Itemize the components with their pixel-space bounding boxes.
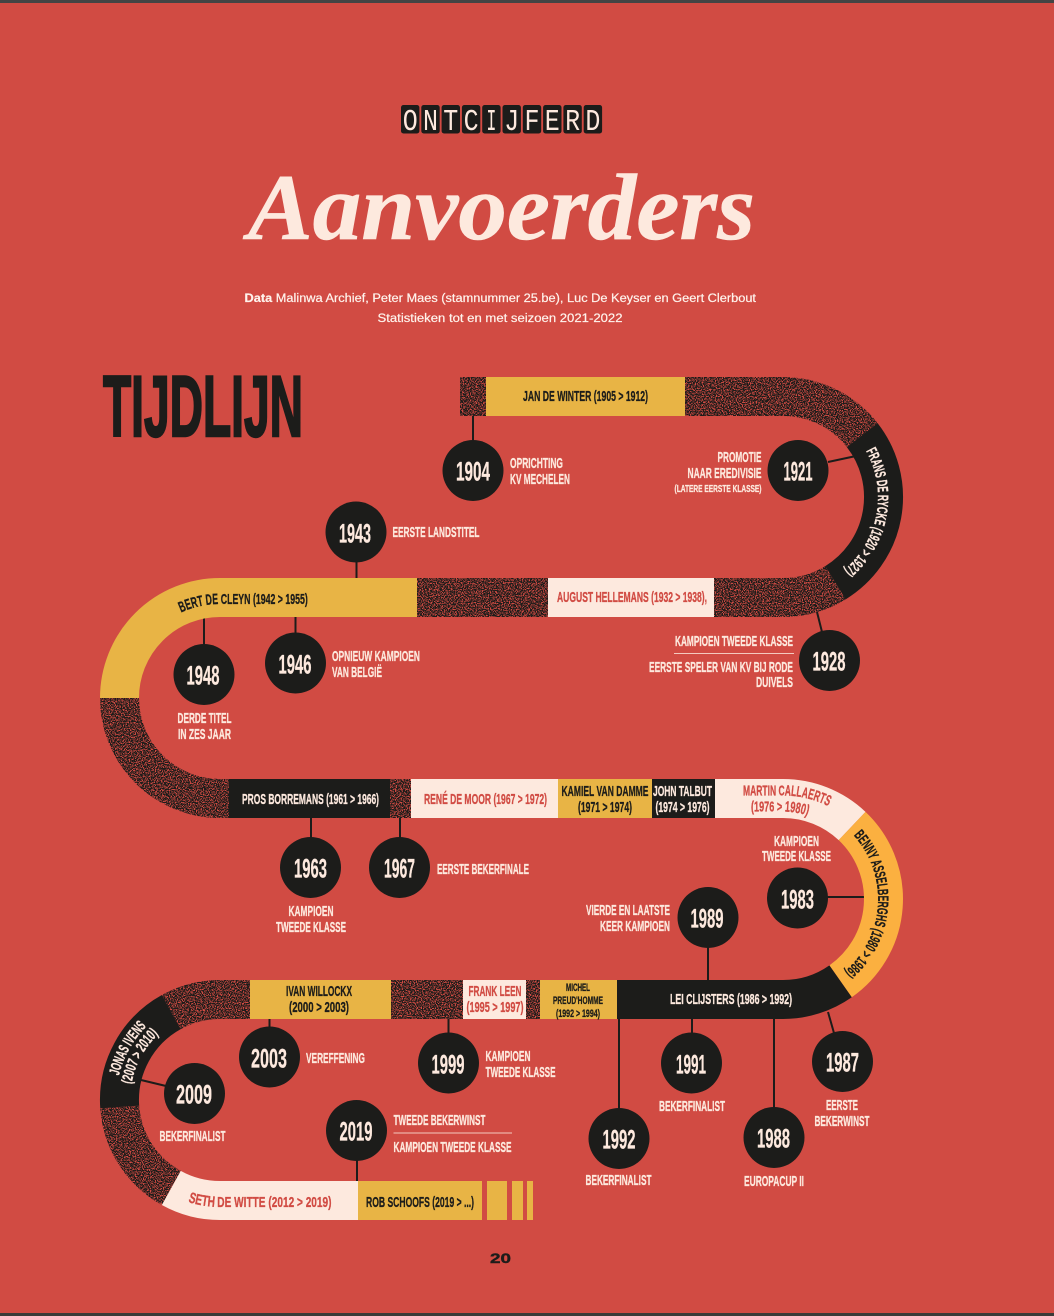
milestone: 1963 [276, 837, 346, 936]
captain segment: Frank Leen: FRANK LEEN [468, 983, 522, 1000]
kicker: ONTCIJFERD flip-board tiles: T [443, 105, 458, 140]
subtitle: data sources: Statistieken tot en met seizoen 2021-2022 [378, 313, 622, 325]
milestone: 1946: OPNIEUW KAMPIOEN [332, 648, 420, 665]
milestone: 1983: 1983 [781, 884, 814, 914]
page number: 20 [490, 1250, 511, 1266]
milestone: 1967 [369, 837, 529, 898]
milestone: 1948: 1948 [186, 660, 220, 690]
milestone: 1943: 1943 [339, 518, 371, 548]
captain segment: René De Moor: RENÉ DE MOOR (1967 > 1972) [424, 791, 547, 808]
milestone: 1991: 1991 [676, 1049, 706, 1079]
milestone: 1904 [442, 440, 570, 501]
milestone: 1904: KV MECHELEN [510, 471, 570, 488]
captain segment: Kamiel Van Damme: KAMIEL VAN DAMME [562, 783, 648, 800]
captain segment: Martin Callaerts: (1976 > 1980) [751, 800, 810, 818]
subtitle: data sources [244, 293, 757, 325]
milestone: 2003: 2003 [251, 1043, 287, 1073]
milestone: 1987: EERSTE [826, 1097, 858, 1114]
captain segment: Rob Schoofs: ROB SCHOOFS (2019 > ...) [366, 1194, 474, 1211]
milestone: 1987 [812, 1031, 873, 1130]
captain segment: Jonas Ivens: JONAS IVENS [109, 1020, 146, 1076]
captain segment: Michel Preud'homme: (1992 > 1994) [556, 1008, 600, 1020]
milestone: 1963: KAMPIOEN [288, 903, 334, 920]
milestone: 2009 [160, 1063, 226, 1145]
milestone: 1928 [649, 630, 860, 691]
milestone: 1946: VAN BELGIË [332, 664, 382, 681]
captain segment: Benny Asselberghs: BENNY ASSELBERGHS (1980 > 1986) [844, 828, 889, 979]
milestone: 1963: 1963 [294, 853, 327, 883]
milestone: 1904: 1904 [456, 456, 490, 486]
captain segment: Pros Borremans: PROS BORREMANS (1961 > 1966) [242, 791, 379, 808]
captain segment: Bert De Cleyn: BERT DE CLEYN (1942 > 1955) [178, 592, 308, 612]
captain segment: Ivan Willockx: (2000 > 2003) [289, 999, 349, 1016]
milestone: 1948 [174, 644, 234, 743]
milestone: 1999: KAMPIOEN [486, 1048, 530, 1065]
milestone: 1992: BEKERFINALIST [586, 1172, 652, 1189]
milestone: 1988: 1988 [757, 1123, 790, 1153]
captain segment: Frans De Rycke [825, 423, 904, 600]
kicker: ONTCIJFERD flip-board tiles [401, 105, 602, 140]
milestone: 1928: KAMPIOEN TWEEDE KLASSE [675, 633, 793, 650]
captain segment: Jonas Ivens: (2007 > 2010) [120, 1028, 160, 1084]
captain segment: Kamiel Van Damme [558, 783, 652, 816]
milestone: 1991 [659, 1032, 725, 1115]
kicker: ONTCIJFERD flip-board tiles: F [524, 105, 540, 140]
milestone: 1921: NAAR EREDIVISIE [688, 465, 762, 482]
milestone: 1992: 1992 [602, 1124, 636, 1154]
captain segment: Michel Preud'homme [540, 982, 617, 1020]
milestone: 1983: KAMPIOEN [774, 833, 819, 850]
captain segment: Bert De Cleyn [100, 578, 417, 698]
captain segment: Benny Asselberghs [830, 812, 903, 998]
captain segment: John Talbut: (1974 > 1976) [656, 799, 710, 816]
captain segment: Frank Leen [463, 983, 526, 1016]
milestone: 1988 [744, 1107, 804, 1190]
captain segment: Seth De Witte: SETH DE WITTE (2012 > 2019) [188, 1192, 332, 1210]
milestone: 1987: 1987 [826, 1047, 859, 1077]
kicker: ONTCIJFERD flip-board tiles: J [504, 105, 519, 140]
captain segment: Martin Callaerts: MARTIN CALLAERTS [744, 785, 832, 806]
kicker: ONTCIJFERD flip-board tiles: I [486, 105, 496, 140]
milestone: 1999: 1999 [432, 1049, 464, 1079]
milestone: 1989: KEER KAMPIOEN [600, 918, 670, 935]
title: Aanvoerders [243, 156, 755, 260]
milestone: 1943: EERSTE LANDSTITEL [392, 524, 480, 541]
milestone: 2003 [239, 1026, 365, 1088]
kicker: ONTCIJFERD flip-board tiles: E [545, 105, 560, 140]
milestone: 1928: 1928 [812, 646, 846, 676]
milestone: 1921: 1921 [784, 456, 812, 486]
milestone: 1921 [674, 440, 828, 501]
milestone: 1987: BEKERWINST [814, 1113, 870, 1130]
captain segment: Ivan Willockx [250, 983, 391, 1016]
captain segment: Kamiel Van Damme: (1971 > 1974) [578, 799, 632, 816]
milestone: 1963: TWEEDE KLASSE [276, 919, 346, 936]
milestone: 1983: TWEEDE KLASSE [762, 848, 831, 865]
captain segment: Lei Clijsters [617, 981, 841, 1008]
milestone: 1921: (LATERE EERSTE KLASSE) [674, 483, 762, 495]
milestone: 1943 [326, 502, 480, 562]
timeline track: undocumented (grainy) stretches [120, 396, 862, 1188]
milestone: 1999 [418, 1032, 556, 1094]
captain segment: Frank Leen: (1995 > 1997) [466, 999, 524, 1016]
subtitle: data sources: Data Malinwa Archief, Peter Maes (stamnummer 25.be), Luc De Keyser en Geert Clerbout [244, 293, 757, 305]
captain segment: August Hellemans: AUGUST HELLEMANS (1932 > 1938), [557, 589, 707, 606]
milestone: 2019: KAMPIOEN TWEEDE KLASSE [394, 1139, 512, 1156]
milestone: 1967: EERSTE BEKERFINALE [437, 861, 529, 878]
kicker: ONTCIJFERD flip-board tiles: R [565, 105, 580, 140]
milestone: 1946 [265, 632, 420, 694]
captain segment: Martin Callaerts [715, 779, 866, 840]
kicker: ONTCIJFERD flip-board tiles: N [423, 105, 438, 140]
milestone: 1989 [586, 887, 738, 948]
milestone: 1989: 1989 [690, 903, 724, 933]
milestone: 2003: VEREFFENING [306, 1050, 365, 1067]
captain segment: Seth De Witte [162, 1170, 358, 1220]
milestone: 2009: BEKERFINALIST [160, 1128, 226, 1145]
kicker: ONTCIJFERD flip-board tiles: D [585, 105, 600, 140]
milestone: 2009: 2009 [176, 1079, 212, 1109]
milestone: 2019 [326, 1100, 512, 1161]
captain segment: Jan De Winter: JAN DE WINTER (1905 > 1912) [523, 388, 648, 405]
milestone: 1928: DUIVELS [756, 674, 793, 691]
milestone: 1946: 1946 [278, 649, 312, 679]
section heading: TIJDLIJN [103, 359, 303, 455]
milestone: 2019: TWEEDE BEKERWINST [394, 1112, 486, 1129]
milestone: 2019: 2019 [340, 1116, 372, 1146]
captain segment: Frans De Rycke: FRANS DE RYCKE (1920 > 1927) [843, 446, 888, 578]
milestone: 1948: IN ZES JAAR [178, 726, 231, 743]
milestone: 1921: PROMOTIE [718, 449, 762, 466]
milestone: 1999: TWEEDE KLASSE [486, 1064, 556, 1081]
milestone: 1904: OPRICHTING [510, 455, 563, 472]
captain segment: Jonas Ivens [100, 995, 181, 1108]
connector lines from milestones to track [141, 416, 865, 1181]
milestone: 1991: BEKERFINALIST [659, 1098, 725, 1115]
captain segment: Ivan Willockx: IVAN WILLOCKX [286, 983, 352, 1000]
milestone: 1988: EUROPACUP II [744, 1173, 804, 1190]
captain segment: Michel Preud'homme: PREUD'HOMME [553, 995, 603, 1007]
milestone: 1928: EERSTE SPELER VAN KV BIJ RODE [649, 659, 793, 676]
milestone: 1992 [586, 1108, 652, 1189]
milestone: 1948: DERDE TITEL [178, 710, 232, 727]
captain segment: John Talbut: JOHN TALBUT [653, 783, 712, 800]
milestone: 1967: 1967 [384, 853, 415, 883]
captain segment: John Talbut [652, 783, 715, 816]
milestone: 1983 [762, 833, 831, 928]
kicker: ONTCIJFERD flip-board tiles: C [464, 105, 479, 140]
milestone: 1989: VIERDE EN LAATSTE [586, 902, 670, 919]
captain segment: Lei Clijsters: LEI CLIJSTERS (1986 > 1992) [670, 991, 792, 1008]
kicker: ONTCIJFERD flip-board tiles: O [403, 105, 418, 140]
captain segment: Michel Preud'homme: MICHEL [566, 982, 590, 994]
